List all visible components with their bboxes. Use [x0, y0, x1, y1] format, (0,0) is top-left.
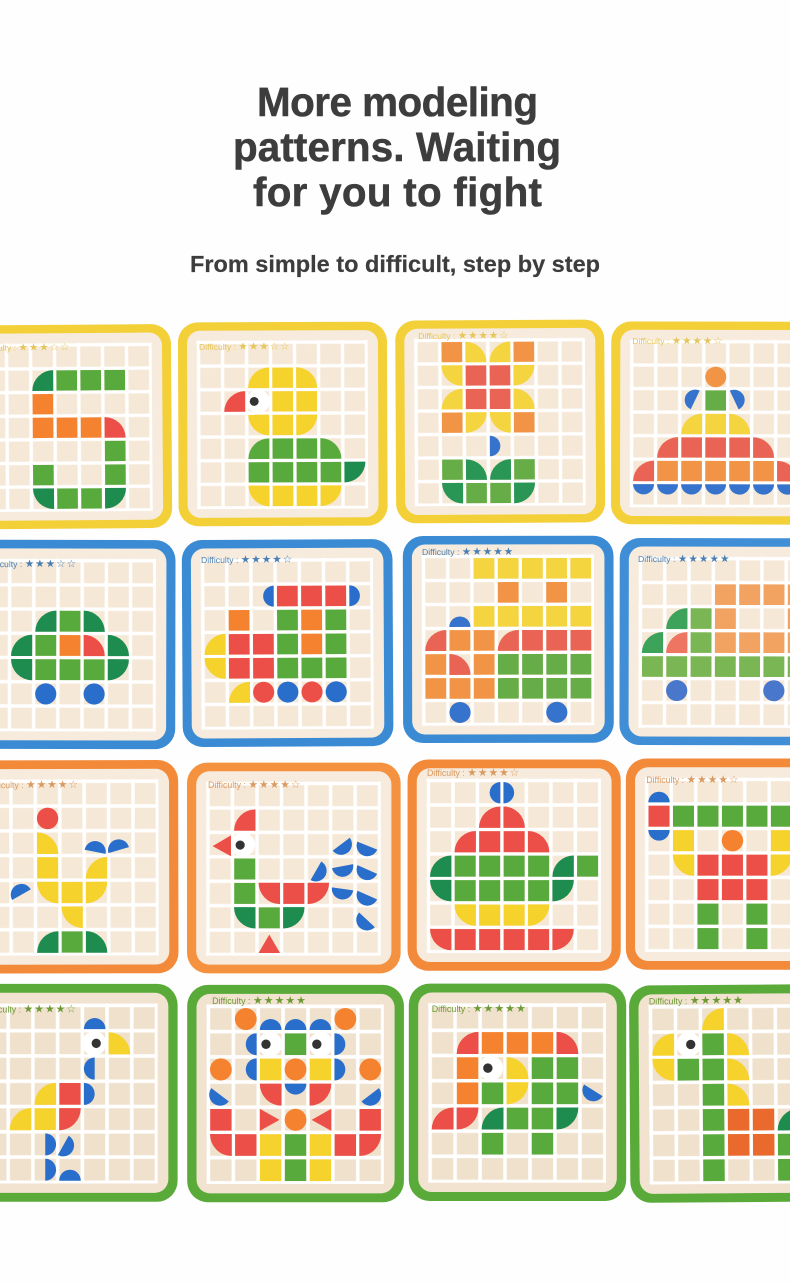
card frame [629, 984, 790, 1203]
card frame [611, 321, 790, 525]
card 16: dinosaur [629, 984, 790, 1203]
card frame [619, 538, 790, 745]
card 13: flamingo [0, 984, 178, 1202]
difficulty label: Difficulty : ★★★★★ [212, 994, 307, 1007]
pattern [32, 370, 126, 509]
card frame [187, 985, 404, 1202]
card frame [409, 984, 626, 1201]
card 11: teapot [408, 760, 621, 971]
pattern [7, 807, 129, 953]
pattern [10, 1018, 130, 1181]
pattern [432, 1032, 603, 1155]
card 15: elephant [409, 984, 626, 1201]
pattern [441, 341, 535, 504]
card 8: vehicle [619, 538, 790, 745]
card frame [0, 984, 178, 1202]
pattern [11, 611, 129, 705]
card frame [0, 760, 179, 974]
difficulty label: Difficulty : ★★★★☆ [201, 554, 293, 566]
title: patterns. Waiting [233, 124, 561, 170]
pattern [648, 792, 790, 949]
difficulty label: Difficulty : ★★★☆☆ [199, 341, 290, 353]
card frame [187, 763, 401, 973]
card frame [403, 536, 614, 743]
card 10: peacock [187, 763, 401, 973]
pattern [204, 585, 360, 703]
card frame [182, 539, 393, 747]
pattern [205, 1008, 385, 1181]
card frame [626, 759, 790, 970]
pattern [224, 367, 366, 506]
difficulty label: Difficulty : ★★★★★ [422, 546, 514, 558]
title: for you to fight [253, 169, 542, 215]
pattern [633, 367, 790, 495]
pattern [642, 584, 790, 701]
card 7: truck [403, 536, 614, 743]
pattern [425, 558, 591, 723]
card 5: car [0, 540, 176, 749]
card 6: train [182, 539, 393, 747]
card 1: number five [0, 324, 172, 529]
card 9: bird on perch [0, 760, 179, 974]
difficulty label: Difficulty : ★★★★☆ [418, 330, 510, 342]
title: More modeling [257, 79, 538, 125]
difficulty label: Difficulty : ★★★★☆ [208, 778, 302, 791]
card frame [395, 319, 605, 523]
pattern [430, 782, 598, 950]
difficulty label: Difficulty : ★★★★★ [649, 994, 744, 1007]
title [233, 79, 561, 215]
card 4: stacked figure [611, 321, 790, 525]
card 2: duck [178, 322, 388, 526]
card 3: flower [395, 319, 605, 523]
card frame [0, 540, 176, 749]
difficulty label: Difficulty : ★★★★☆ [632, 335, 724, 347]
difficulty label: Difficulty : ★★★★★ [638, 553, 731, 565]
card frame [408, 760, 621, 971]
subtitle: From simple to difficult, step by step [190, 251, 600, 277]
difficulty label: Difficulty : ★★★★☆ [646, 773, 740, 786]
card frame [0, 324, 172, 529]
difficulty label: Difficulty : ★★★★☆ [427, 766, 520, 779]
card frame [178, 322, 388, 526]
difficulty label: Difficulty : ★★★★★ [432, 1002, 527, 1015]
pattern [213, 809, 377, 953]
card 12: figure with arms [626, 759, 790, 970]
card 14: robot bear [187, 985, 404, 1202]
pattern [652, 1007, 790, 1182]
